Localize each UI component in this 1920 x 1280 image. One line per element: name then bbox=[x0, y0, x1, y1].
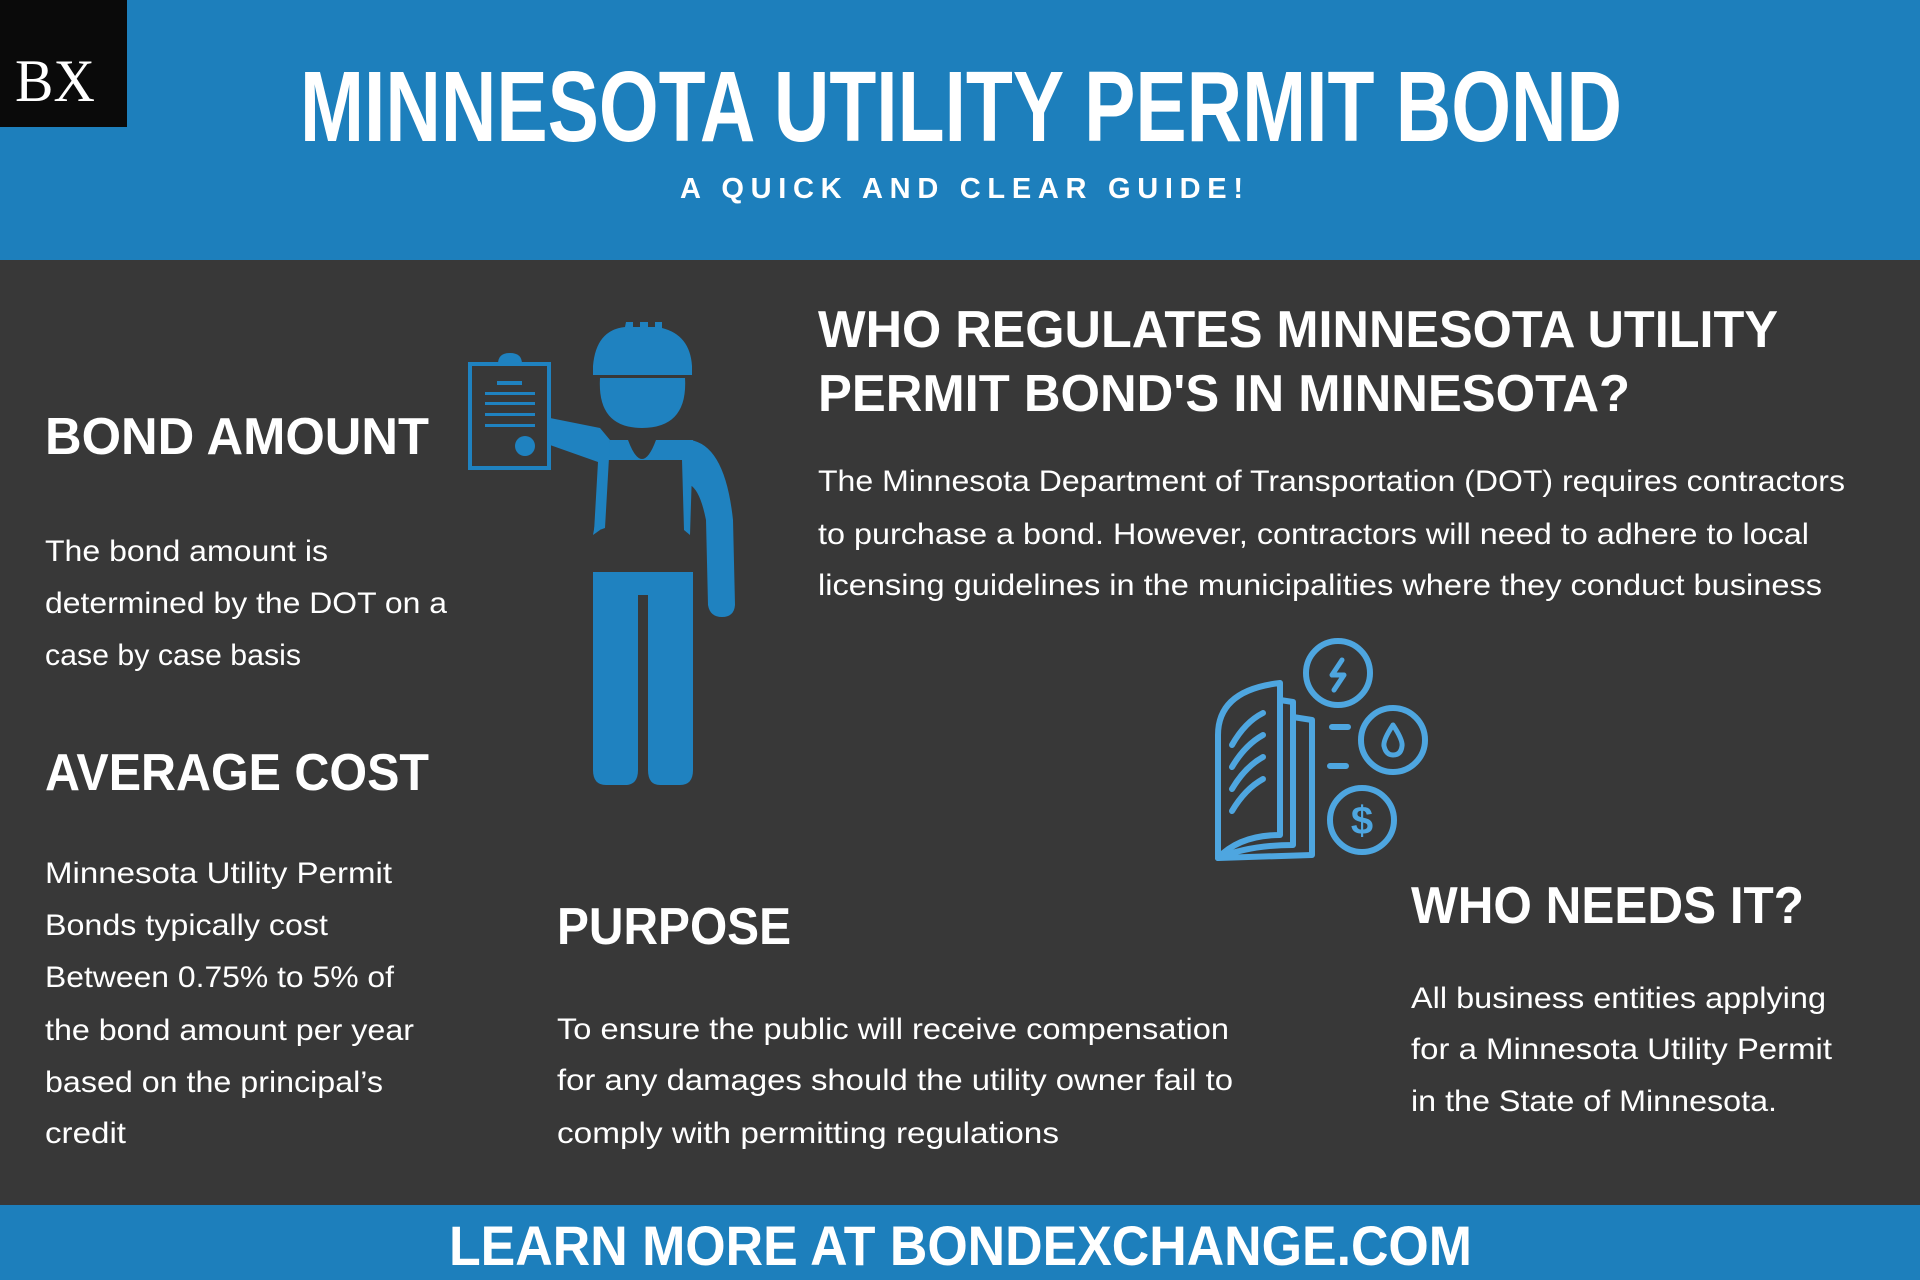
text: who needs it bbox=[1411, 982, 1833, 1118]
logo: BX bbox=[0, 0, 127, 127]
text: average cost: credit bbox=[45, 1117, 127, 1150]
clipboard bbox=[470, 353, 549, 468]
hard hat bbox=[593, 322, 692, 375]
text: average cost: the bond amount per year bbox=[45, 1014, 414, 1047]
text: who needs it: for a Minnesota Utility Permit bbox=[1411, 1033, 1833, 1066]
heading: who regulates: WHO REGULATES MINNESOTA UTILITY bbox=[818, 301, 1778, 359]
icon: utility book with symbols: $ bbox=[1351, 799, 1373, 843]
icon: worker holding clipboard bbox=[470, 322, 735, 785]
text: who regulates: licensing guidelines in the municipalities where they conduct business bbox=[818, 569, 1822, 602]
text: bond amount: determined by the DOT on a bbox=[45, 587, 447, 620]
right arm bbox=[690, 440, 735, 617]
header band bbox=[0, 0, 1920, 260]
text: who regulates: The Minnesota Department of Transportation (DOT) requires contractors bbox=[818, 465, 1845, 498]
heading: who regulates: PERMIT BOND'S IN MINNESOTA? bbox=[818, 365, 1630, 423]
text: average cost: Between 0.75% to 5% of bbox=[45, 961, 395, 994]
left raised arm bbox=[550, 418, 610, 532]
text: bond amount: The bond amount is bbox=[45, 535, 328, 568]
text: purpose: for any damages should the utility owner fail to bbox=[557, 1064, 1233, 1097]
heading: who regulates bbox=[818, 301, 1778, 423]
text: who needs it: All business entities applying bbox=[1411, 982, 1826, 1015]
logo: BX: BX bbox=[15, 48, 95, 114]
text: purpose bbox=[557, 1013, 1233, 1150]
text: purpose: comply with permitting regulations bbox=[557, 1117, 1059, 1150]
heading: who needs it: WHO NEEDS IT? bbox=[1411, 877, 1804, 935]
torso straps and chest bbox=[593, 440, 693, 535]
text: average cost: Minnesota Utility Permit bbox=[45, 857, 393, 890]
pants bbox=[593, 572, 693, 785]
heading: bond amount: BOND AMOUNT bbox=[45, 408, 429, 466]
panel: who regulates bbox=[818, 301, 1845, 602]
text: bond amount: case by case basis bbox=[45, 639, 301, 672]
footer band bbox=[0, 1205, 1920, 1280]
panel: who needs it bbox=[1411, 877, 1833, 1118]
text: who needs it: in the State of Minnesota. bbox=[1411, 1085, 1777, 1118]
icon: utility book with symbols bbox=[1218, 641, 1425, 858]
subtitle: A QUICK AND CLEAR GUIDE! bbox=[680, 173, 1243, 205]
text: average cost: based on the principal’s bbox=[45, 1066, 383, 1099]
panel: average cost bbox=[45, 744, 429, 1150]
text: who regulates bbox=[818, 465, 1845, 602]
text: bond amount bbox=[45, 535, 447, 672]
panel: purpose bbox=[557, 898, 1233, 1150]
heading: purpose: PURPOSE bbox=[557, 898, 791, 956]
panel: bond amount bbox=[45, 408, 447, 672]
footer text: LEARN MORE AT BONDEXCHANGE.COM bbox=[449, 1214, 1472, 1277]
text: purpose: To ensure the public will receive compensation bbox=[557, 1013, 1229, 1046]
head bbox=[600, 378, 685, 428]
heading: average cost: AVERAGE COST bbox=[45, 744, 429, 802]
text: average cost: Bonds typically cost bbox=[45, 909, 329, 942]
text: average cost bbox=[45, 857, 414, 1150]
text: who regulates: to purchase a bond. However, contractors will need to adhere to local bbox=[818, 518, 1809, 551]
